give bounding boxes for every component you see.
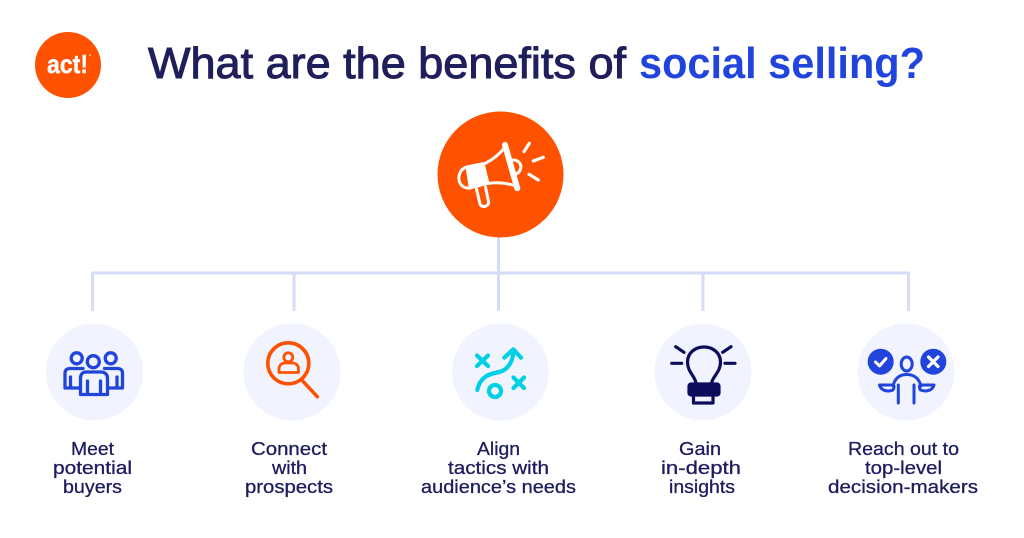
label: decision-makers — [828, 476, 978, 497]
label: Align — [477, 438, 520, 459]
panel: gain insights — [654, 324, 752, 497]
label: Reach out to — [848, 438, 959, 459]
label: tactics with — [448, 457, 549, 478]
label: prospects — [245, 476, 333, 497]
panel: meet potential buyers — [46, 324, 143, 497]
panel: align tactics — [421, 324, 576, 497]
title: What are the benefits of — [148, 39, 627, 88]
title — [148, 39, 925, 88]
label — [421, 438, 576, 497]
icon: light bulb — [672, 347, 735, 403]
label: Meet — [71, 438, 114, 459]
connector tree — [92, 237, 908, 311]
icon: megaphone in orange circle — [438, 112, 564, 238]
label — [661, 438, 741, 497]
logo: act!: act! — [47, 49, 88, 79]
panel: connect with prospects — [244, 324, 340, 497]
panel: reach decision-makers — [828, 324, 978, 497]
label: insights — [669, 476, 735, 497]
icon: person weighing choices — [869, 350, 945, 403]
label: Gain — [679, 438, 721, 459]
icon: magnifier with person — [268, 343, 317, 397]
label — [53, 438, 132, 497]
label: in-depth — [661, 457, 741, 478]
label: top-level — [865, 457, 942, 478]
label: buyers — [63, 476, 122, 497]
label — [828, 438, 978, 497]
label — [245, 438, 333, 497]
logo: act! — [35, 32, 101, 98]
icon: group of people — [65, 353, 122, 394]
label: with — [271, 457, 307, 478]
label: potential — [53, 457, 132, 478]
label: Connect — [251, 438, 327, 459]
icon: strategy play — [477, 349, 524, 397]
label: audience’s needs — [421, 476, 576, 497]
title: social selling? — [639, 39, 925, 88]
